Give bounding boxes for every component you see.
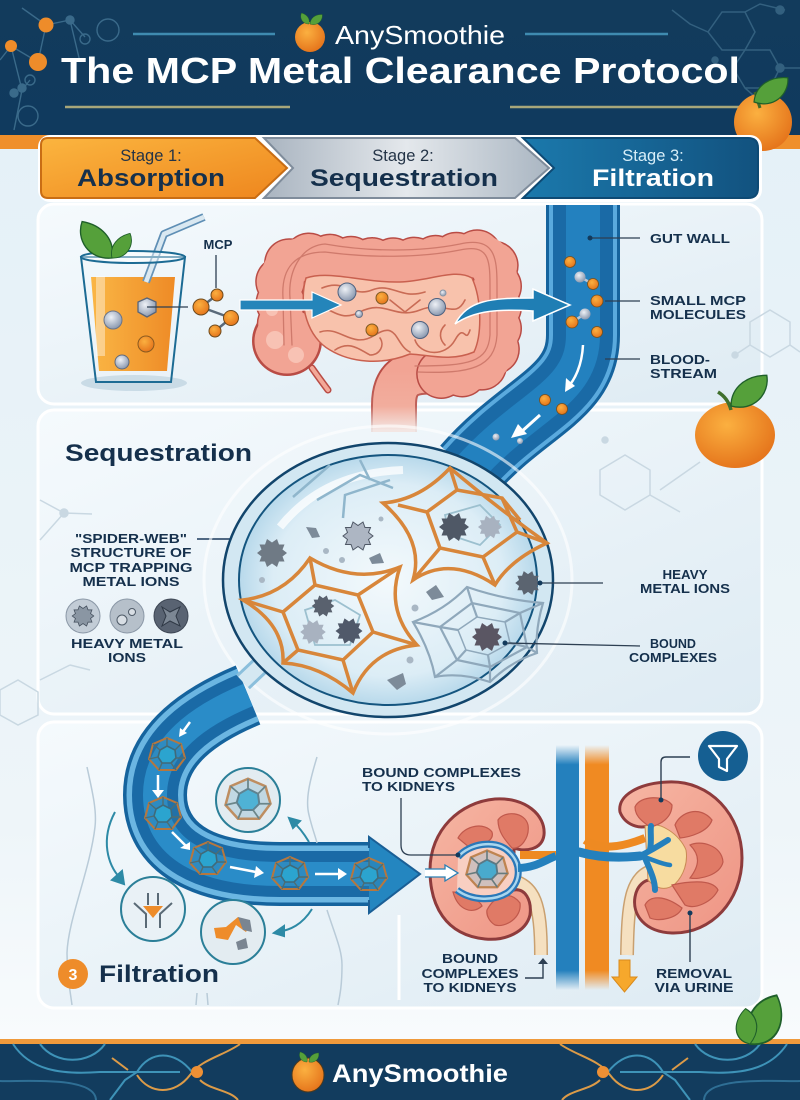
badge: 3 [58,959,88,989]
label: bound complexes to kidneys top: BOUND COMPLEXES [362,765,521,780]
juice [91,277,175,371]
decoration: faint molecules [0,310,800,725]
decoration: footer right [560,1044,800,1100]
stage 1 chevron [41,138,287,198]
icon: footer orange logo [292,1052,324,1092]
stage 1 chevron: Absorption [77,165,225,192]
labels: lens [502,567,730,665]
labels: bloodstream: STREAM [650,366,717,381]
panel: stage bar [38,135,762,202]
panel: sequestration [38,410,762,714]
icon: circle funnel [121,877,185,941]
bloodstream vessel upper [468,205,583,470]
icon: glass of orange juice [72,217,204,391]
orange web 2 [243,558,417,693]
arrow: into nephron [425,865,458,881]
decoration: footer left [0,1044,240,1100]
stage 1 chevron: Stage 1: [120,147,182,165]
body outline [67,757,342,1005]
labels: lens: BOUND [650,636,696,651]
footer [0,1039,800,1100]
labels: lens: COMPLEXES [629,650,717,665]
icon: orange top right [734,76,792,151]
badge: 3: 3 [69,967,78,984]
label: spider-web structure [70,531,237,589]
large intestine [252,242,497,432]
heading: sequestration: Sequestration [65,440,252,467]
label: bound complexes bottom [422,951,548,995]
arrow: gut to bloodstream [455,289,570,324]
label: spider-web structure: METAL IONS [82,574,180,589]
labels: lens: HEAVY [662,567,708,582]
central vessels [556,745,645,990]
stage 3 chevron: Stage 3: [622,147,684,165]
label: removal via urine: REMOVAL [656,966,732,981]
label: removal via urine [654,910,734,995]
labels: bloodstream: MOLECULES [650,307,746,322]
gray web [413,587,543,682]
faint top web [293,460,393,518]
appendix [312,368,328,390]
MCP label: MCP [204,237,233,252]
labels: lens: METAL IONS [640,581,730,596]
arrow: juice to gut [240,292,341,318]
magnifier handle [243,645,282,682]
decorative header lines [65,34,740,107]
label: bound complexes bottom: TO KIDNEYS [424,980,517,995]
labels: bloodstream [588,231,746,381]
colon [252,242,497,376]
magnifier lens [223,443,553,717]
icon: funnel badge [658,731,748,802]
label: heavy metal ions: IONS [108,650,146,665]
icon: header orange logo [295,13,325,52]
title: The MCP Metal Clearance Protocol [61,50,740,91]
metal ions [257,513,541,690]
icon: leaves bottom right [727,993,794,1049]
icon: circle fragments [201,900,265,964]
brand name: AnySmoothie [335,20,505,50]
decoration: hexagons top right [672,4,800,110]
small intestine [303,274,480,361]
arrows: small curved [107,812,312,936]
footer brand name: AnySmoothie [332,1060,508,1088]
header banner [0,0,800,149]
filtration tube [155,426,572,874]
molecules in gut [338,283,446,338]
label: heavy metal ions: HEAVY METAL [71,636,183,651]
kidney right [579,782,742,955]
stage 2 chevron [264,138,549,198]
label: bound complexes bottom: BOUND [442,951,498,966]
orange web 1 [383,468,547,585]
label: bound complexes to kidneys top [362,765,521,858]
labels: bloodstream: GUT WALL [650,231,730,246]
icon: orange mid right [695,374,775,468]
decoration: molecule top left [0,8,119,130]
icon: circle complex [216,768,280,832]
stage 2 chevron: Sequestration [310,165,498,192]
label: bound complexes to kidneys top: TO KIDNEYS [362,779,455,794]
molecules in juice [138,298,156,317]
stage 3 chevron: Filtration [592,165,714,192]
ureter left [510,880,541,955]
stage 2 chevron: Stage 2: [372,147,434,165]
arrow head: to kidneys [369,837,420,913]
label: spider-web structure: MCP TRAPPING [70,560,192,575]
ureter right [627,870,655,955]
label: heavy metal ions [71,636,183,665]
labels: bloodstream: SMALL MCP [650,293,746,308]
panel: absorption [38,204,762,404]
label: removal via urine: VIA URINE [654,980,734,995]
rectum [394,372,452,432]
arrow: urine down [612,960,637,992]
panel: filtration [38,722,762,1008]
leaves [72,220,121,262]
heading: filtration: Filtration [99,961,219,988]
icons: heavy metal ions [66,599,188,633]
straw [146,217,204,282]
kidney left [430,799,556,955]
complexes in tube [145,722,387,890]
label: spider-web structure: "SPIDER-WEB" [75,531,187,546]
icon: MCP molecule [147,255,238,337]
stage 3 chevron [523,138,758,198]
molecules in bloodstream [492,256,603,444]
labels: bloodstream: BLOOD- [650,352,710,367]
label: spider-web structure: STRUCTURE OF [70,545,192,560]
label: bound complexes bottom: COMPLEXES [422,966,519,981]
